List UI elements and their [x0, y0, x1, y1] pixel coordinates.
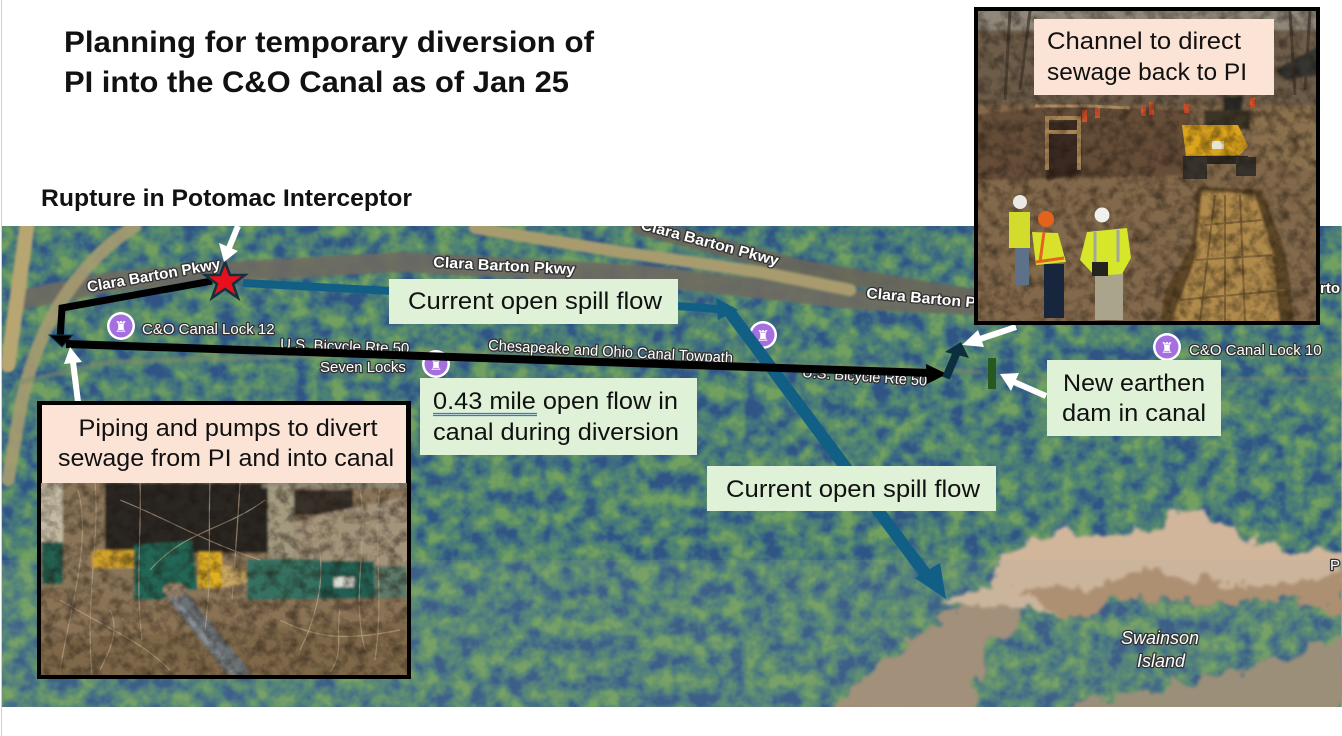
title: [64, 26, 595, 99]
map labels: Island: [1137, 651, 1186, 671]
arrow: to dam: [1000, 373, 1046, 396]
title: PI into the C&O Canal as of Jan 25: [64, 66, 569, 99]
river and sandbars: [825, 512, 1342, 715]
arrow: to pumps: [64, 347, 82, 402]
forest canopy: [2, 226, 1342, 707]
heading: rupture label: Rupture in Potomac Interceptor: [41, 185, 412, 212]
callout: 0.43 mile: canal during diversion: [433, 419, 679, 446]
callout: current open spill flow 1: Current open spill flow: [408, 288, 663, 315]
map labels: Clara Barton Pkwy: [639, 216, 781, 270]
title: Planning for temporary diversion of: [64, 26, 595, 59]
map labels: U.S. Bicycle Rte 50: [802, 364, 928, 390]
map labels: [86, 216, 1340, 671]
panel: pump photo: [35, 401, 413, 680]
callout: current open spill flow 2: Current open spill flow: [726, 476, 981, 503]
callout: new earthen dam: dam in canal: [1062, 400, 1206, 427]
map labels: C&O Canal Lock 10: [1189, 342, 1322, 359]
pump caption: Piping and pumps to divert: [78, 415, 378, 442]
callout: 0.43 mile: 0.43 mile open flow in: [433, 388, 678, 415]
map labels: Clara Barton Pkwy: [86, 256, 222, 296]
arrow: to channel: [962, 327, 1016, 347]
channel caption: [1034, 19, 1274, 95]
lock markers: ♜: [756, 327, 770, 345]
lock markers: ♜: [1160, 339, 1174, 357]
arrow: current spill flow, blue: [243, 283, 946, 599]
icon: red star rupture marker: [205, 262, 245, 298]
channel caption: Channel to direct: [1047, 28, 1241, 55]
callout: new earthen dam: New earthen: [1063, 370, 1205, 397]
map labels: Chesapeake and Ohio Canal Towpath: [488, 337, 733, 367]
map labels: Clara Barton Pkwy: [433, 254, 576, 278]
lock markers: [107, 312, 1181, 378]
map labels: U.S. Bicycle Rte 50: [280, 336, 410, 358]
roads: [8, 226, 1342, 480]
left edge rule: [1, 0, 2, 736]
lower haze: [2, 560, 1342, 707]
arrow: to rupture: [219, 226, 238, 262]
callout: current open spill flow 1: [389, 279, 678, 324]
map labels: rto: [1320, 280, 1340, 297]
lock markers: ♜: [429, 356, 443, 374]
callout: 0.43 mile: [420, 378, 697, 455]
satellite map: [2, 216, 1342, 715]
pump caption: sewage from PI and into canal: [58, 445, 394, 472]
pump caption: [42, 405, 406, 483]
panel: channel photo: [972, 5, 1322, 325]
map labels: P: [1330, 557, 1340, 574]
callout: new earthen dam: [1047, 360, 1221, 436]
map labels: Swainson: [1121, 628, 1199, 648]
channel caption: sewage back to PI: [1047, 59, 1247, 86]
earthen dam marker: [988, 358, 996, 389]
map labels: Seven Locks: [320, 359, 406, 376]
workers: [1009, 195, 1131, 320]
callout: current open spill flow 2: [707, 466, 996, 511]
lock markers: ♜: [114, 318, 128, 336]
map labels: C&O Canal Lock 12: [142, 321, 275, 338]
map labels: Clara Barton P: [866, 285, 977, 312]
arrow: diversion route, black: [49, 281, 969, 384]
